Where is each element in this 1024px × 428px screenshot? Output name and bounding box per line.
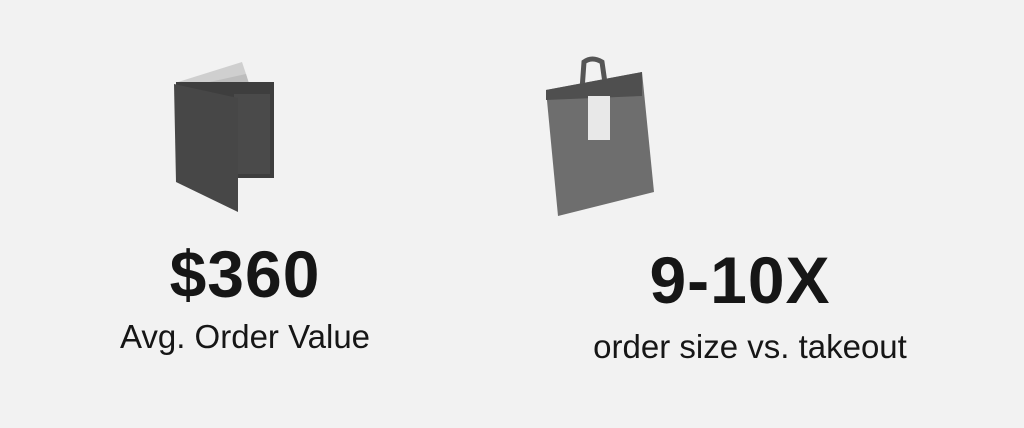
- heading: 9-10X: 9-10X: [649, 243, 831, 317]
- text: Avg. Order Value: Avg. Order Value: [120, 318, 370, 355]
- heading: $360: $360: [170, 237, 320, 311]
- panel: order value: [120, 62, 370, 355]
- icon: shopping bag: [546, 56, 654, 216]
- panel: order size: [546, 56, 907, 365]
- icon: wallet: [174, 62, 274, 212]
- text: order size vs. takeout: order size vs. takeout: [593, 328, 907, 365]
